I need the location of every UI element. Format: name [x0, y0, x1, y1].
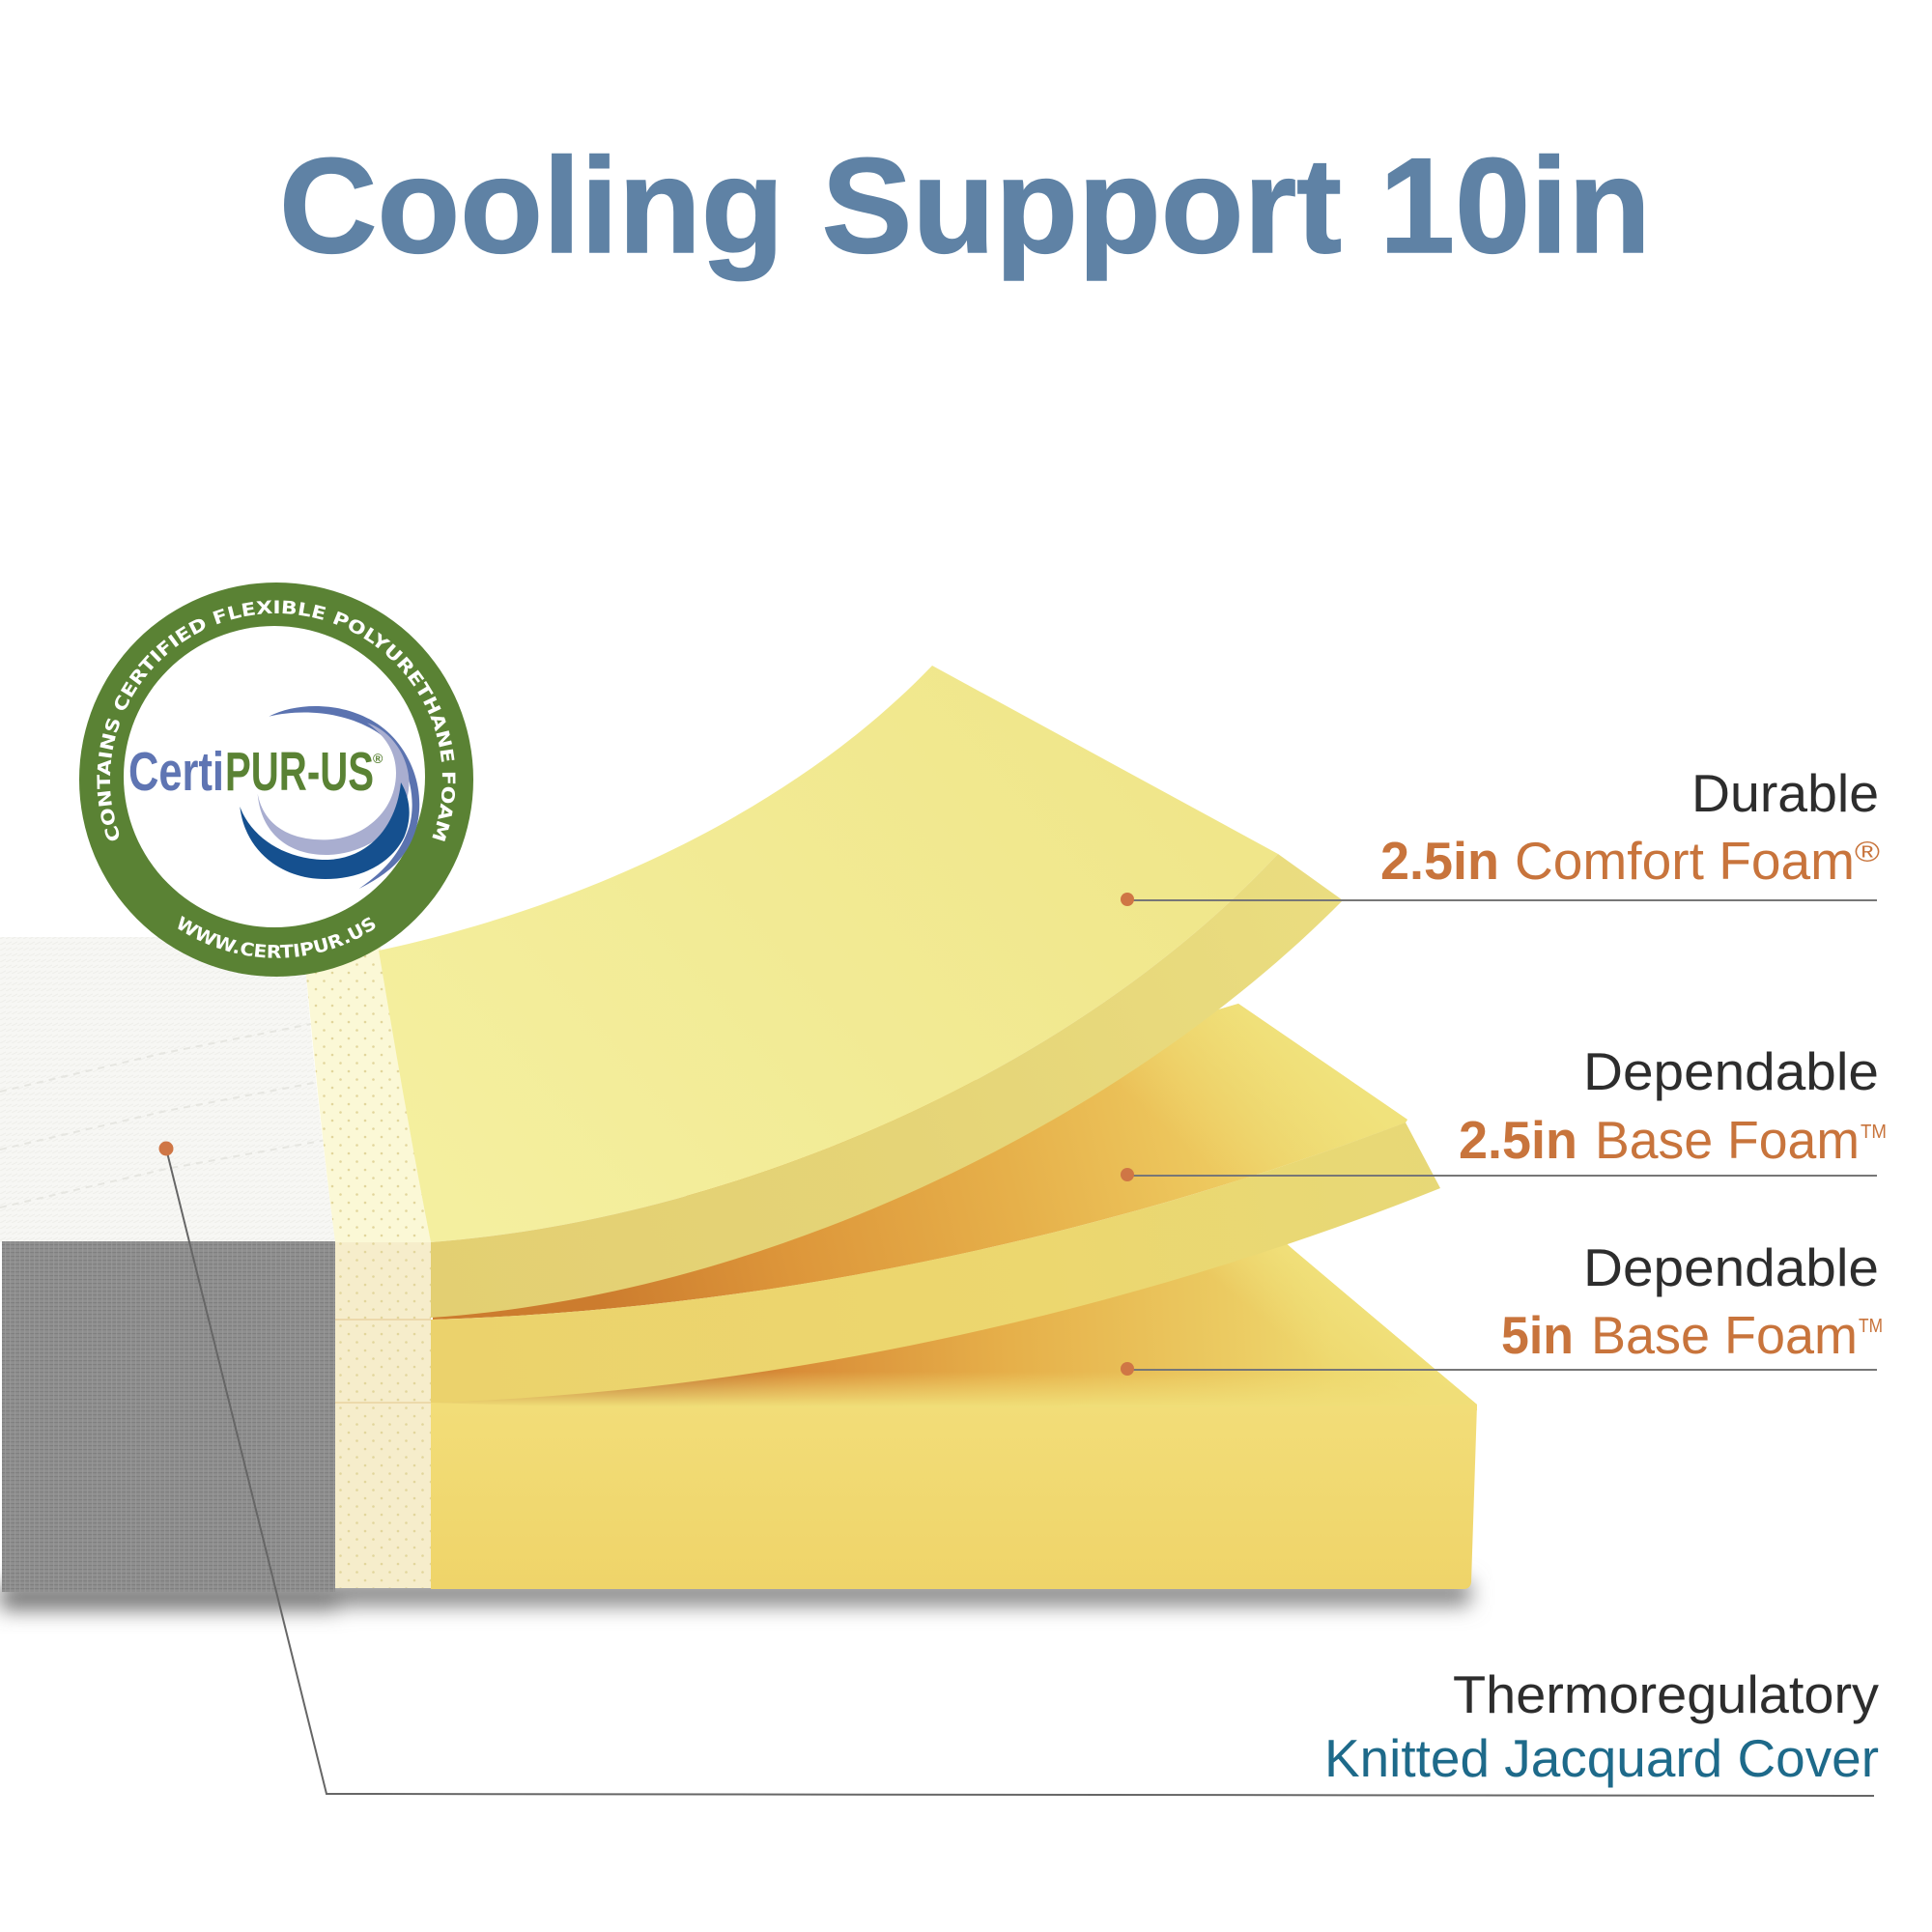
callout: base foam 5in: 5in	[1501, 1305, 1574, 1365]
logo wordmark: ®	[373, 751, 384, 766]
callout: cover	[1324, 1664, 1879, 1788]
CertiPUR-US badge	[79, 582, 473, 977]
perforated foam edge	[305, 942, 431, 1588]
logo wordmark: Certi	[128, 741, 224, 803]
leader lines and dots	[158, 893, 1877, 1796]
callout: comfort foam: ®	[1855, 837, 1880, 868]
ring text path bottom	[175, 926, 378, 958]
ground shadow	[0, 1580, 1470, 1609]
leader: comfort foam	[1121, 893, 1877, 906]
ring text top: CONTAINS CERTIFIED FLEXIBLE POLYURETHANE FOAM	[97, 600, 456, 841]
callout: base foam 2.5in: 2.5in	[1459, 1110, 1577, 1170]
callout: comfort foam: Durable	[1691, 763, 1879, 823]
callout: base foam 2.5in: TM	[1861, 1122, 1887, 1143]
mattress illustration	[0, 666, 1477, 1609]
middle foam layer: 2.5in	[431, 1004, 1440, 1403]
swoosh logo	[240, 706, 419, 889]
mattress cover side	[2, 1241, 335, 1592]
ring text path	[110, 613, 442, 839]
callout: base foam 2.5in: Base Foam	[1595, 1110, 1860, 1170]
callout: comfort foam	[1380, 763, 1880, 891]
badge ring	[79, 582, 473, 977]
leader: base foam 5in	[1121, 1362, 1877, 1376]
leader: cover	[158, 1142, 1874, 1796]
title: Cooling Support 10in	[279, 129, 1651, 281]
top foam layer: 2.5in comfort	[379, 666, 1343, 1318]
badge centre	[124, 626, 425, 927]
callout: cover: Thermoregulatory	[1453, 1664, 1879, 1724]
callout: comfort foam: 2.5in	[1380, 831, 1499, 891]
callout: base foam 5in: TM	[1859, 1316, 1883, 1337]
callout: base foam 2.5in: Dependable	[1583, 1041, 1879, 1101]
mattress cover top	[0, 937, 335, 1242]
callout: base foam 5in: Dependable	[1583, 1237, 1879, 1297]
callout: base foam 5in	[1501, 1237, 1883, 1365]
callout: comfort foam: Comfort Foam	[1515, 831, 1855, 891]
callout: cover: Knitted Jacquard Cover	[1324, 1728, 1879, 1788]
ring text bottom: WWW.CERTIPUR.US	[178, 916, 375, 958]
leader: base foam 2.5in	[1121, 1168, 1877, 1181]
callout: base foam 2.5in	[1459, 1041, 1887, 1170]
bottom foam layer: 5in	[431, 1208, 1477, 1589]
callout: base foam 5in: Base Foam	[1591, 1305, 1858, 1365]
logo wordmark: PUR-US	[225, 741, 374, 803]
logo wordmark	[128, 741, 384, 803]
